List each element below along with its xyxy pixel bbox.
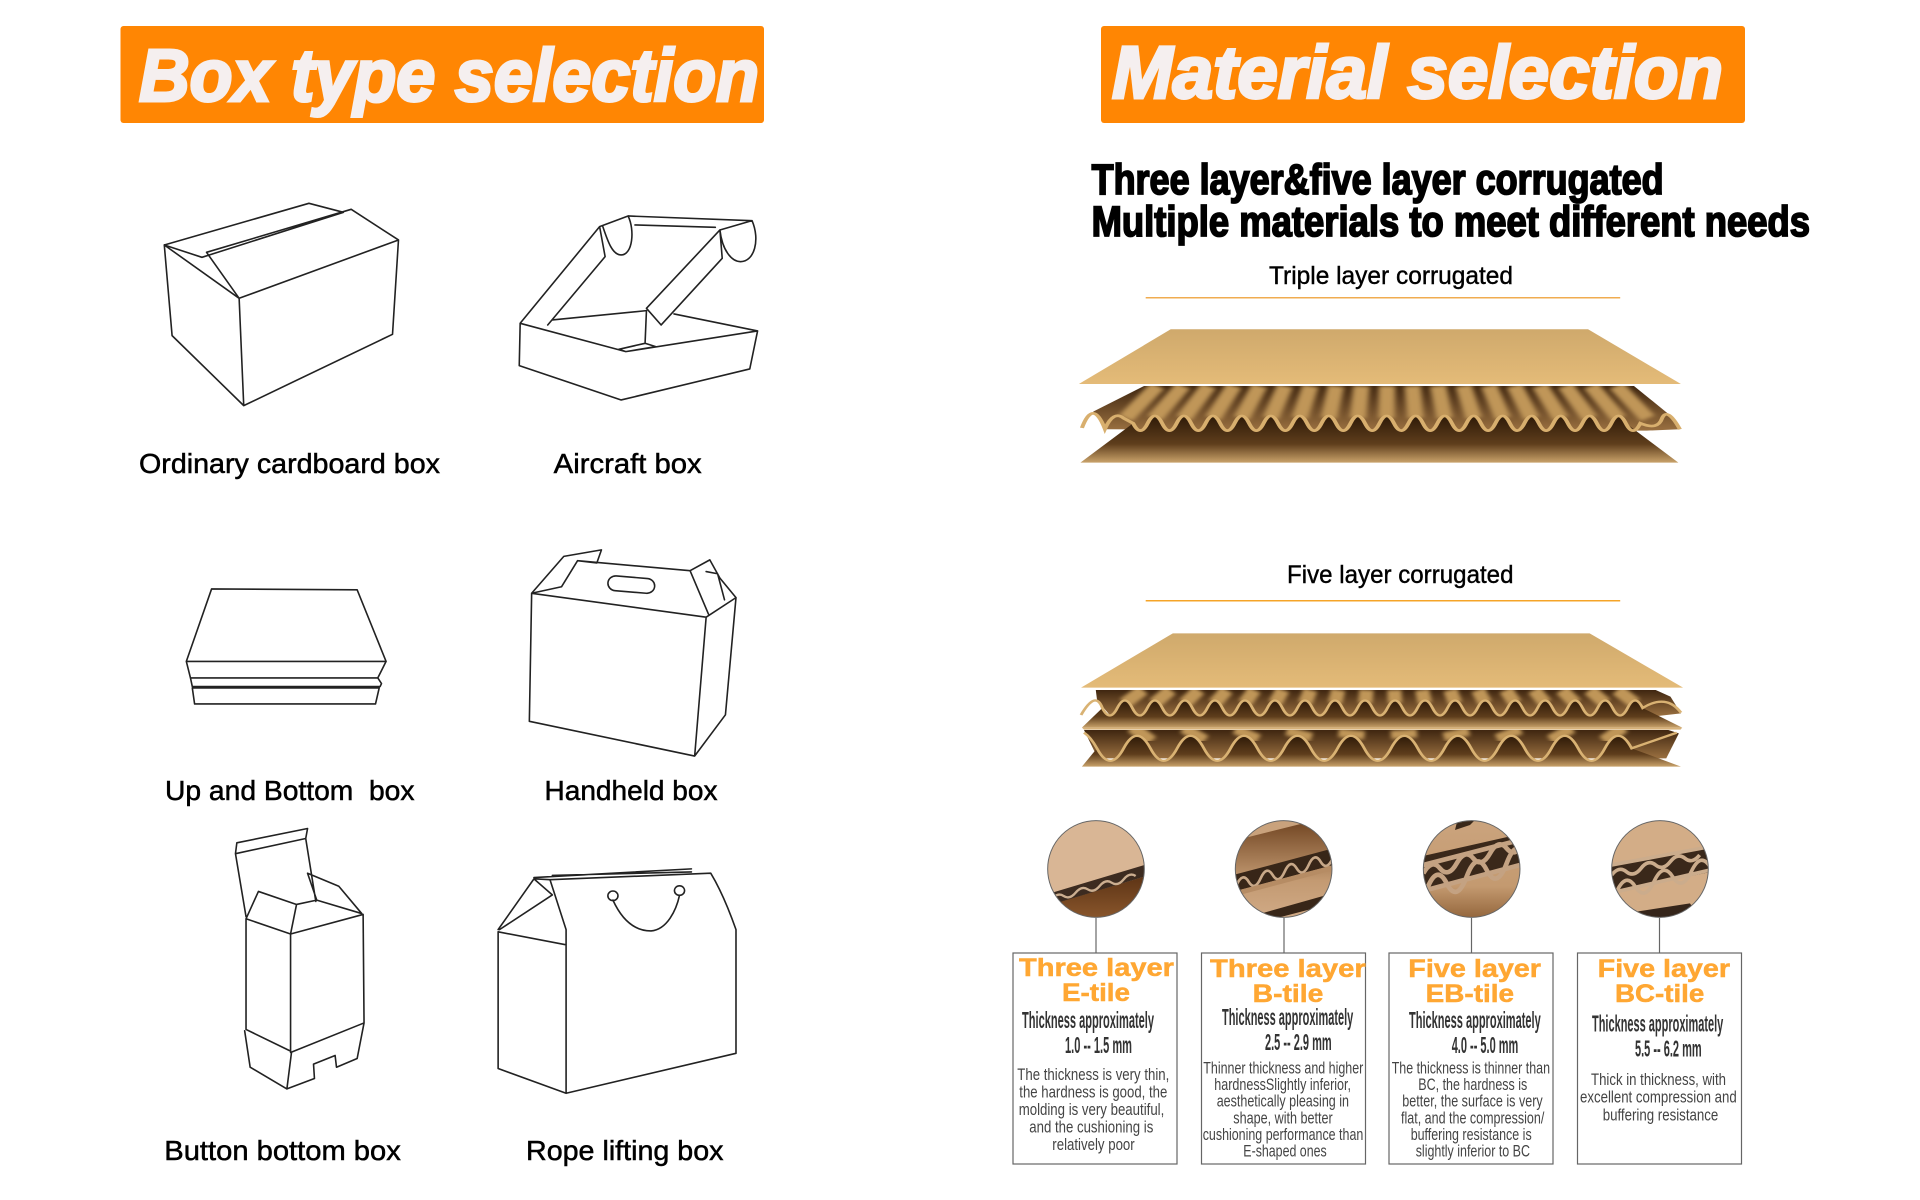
card: three layer B-tile [1202, 807, 1366, 1164]
icon: button bottom box [235, 829, 364, 1089]
card: three layer B-tile: Thinner thickness and higher [1203, 1058, 1364, 1077]
card: five layer EB-tile: EB-tile [1426, 980, 1514, 1008]
icon: EB-tile cross-section [1422, 820, 1520, 918]
subheading: layers and materials: Multiple materials to meet different needs [1092, 198, 1810, 246]
icon: B-tile cross-section [1234, 820, 1332, 918]
icon: aircraft box [519, 216, 758, 400]
card: three layer B-tile: B-tile [1253, 980, 1323, 1008]
icon: BC-tile cross-section [1611, 820, 1709, 918]
label: up and bottom box: Up and Bottom box [165, 775, 414, 806]
panel: material selection [1013, 26, 1810, 1164]
icon: ordinary cardboard box [164, 203, 398, 406]
heading: material selection: Material selection [1112, 31, 1723, 114]
label: rope lifting box: Rope lifting box [526, 1135, 724, 1166]
label: button bottom box: Button bottom box [164, 1135, 401, 1166]
card: five layer EB-tile: 4.0 -- 5.0 mm [1452, 1032, 1518, 1058]
card: three layer B-tile: 2.5 -- 2.9 mm [1265, 1029, 1332, 1055]
card: three layer B-tile: cushioning performance than [1203, 1125, 1363, 1144]
card: five layer EB-tile: better, the surface is very [1402, 1092, 1543, 1111]
card: three layer E-tile [1013, 817, 1177, 1164]
label: handheld box: Handheld box [544, 775, 718, 806]
card: three layer B-tile: shape, with better [1233, 1108, 1333, 1127]
card: five layer EB-tile: The thickness is thinner than [1392, 1058, 1550, 1077]
card: five layer EB-tile: Thickness approximately [1409, 1007, 1541, 1033]
card: five layer BC-tile [1578, 817, 1742, 1164]
card: three layer B-tile: Thickness approximately [1222, 1004, 1353, 1030]
card: five layer EB-tile [1389, 817, 1553, 1164]
card: three layer E-tile: The thickness is very thin, [1017, 1065, 1169, 1084]
card: three layer B-tile: Three layer [1210, 955, 1366, 983]
card: five layer BC-tile: buffering resistance [1603, 1105, 1718, 1124]
card: five layer EB-tile: BC, the hardness is [1418, 1075, 1527, 1094]
illustration: triple layer corrugated sheet [1079, 329, 1681, 463]
card: five layer EB-tile: slightly inferior to BC [1416, 1142, 1530, 1161]
subheading: layers and materials [1092, 156, 1810, 246]
illustration: five layer corrugated sheet [1081, 633, 1683, 767]
card: five layer BC-tile: 5.5 -- 6.2 mm [1635, 1036, 1702, 1062]
icon: handheld box [529, 550, 736, 756]
icon: rope lifting box [498, 869, 736, 1093]
heading: box type selection: Box type selection [139, 34, 759, 117]
card: five layer BC-tile: excellent compression and [1580, 1088, 1737, 1107]
icon: E-tile cross-section [1047, 820, 1145, 918]
card: five layer EB-tile: buffering resistance is [1411, 1125, 1532, 1144]
card: three layer E-tile: the hardness is good, the [1019, 1083, 1167, 1102]
label: ordinary cardboard box: Ordinary cardboard box [139, 448, 440, 479]
card: five layer EB-tile: flat, and the compression/ [1401, 1108, 1544, 1127]
card: three layer E-tile: molding is very beautiful, [1019, 1100, 1164, 1119]
label: triple layer corrugated: Triple layer corrugated [1269, 262, 1513, 290]
card: three layer E-tile: Three layer [1019, 954, 1174, 982]
card: five layer BC-tile: Thickness approximately [1592, 1011, 1723, 1037]
card: three layer E-tile: Thickness approximately [1022, 1007, 1154, 1033]
card: three layer B-tile: hardnessSlightly inferior, [1214, 1075, 1351, 1094]
card: five layer EB-tile: Five layer [1408, 955, 1541, 983]
card: three layer B-tile: aesthetically pleasing in [1217, 1092, 1349, 1111]
card: five layer BC-tile: Five layer [1598, 955, 1730, 983]
card: three layer E-tile: relatively poor [1052, 1135, 1135, 1154]
icon: up and bottom box [186, 589, 386, 704]
subheading: layers and materials: Three layer&five layer corrugated [1092, 156, 1664, 204]
card: five layer BC-tile: BC-tile [1615, 980, 1704, 1008]
card: three layer E-tile: 1.0 -- 1.5 mm [1065, 1032, 1132, 1058]
card: three layer E-tile: and the cushioning is [1029, 1118, 1153, 1137]
card: three layer E-tile: E-tile [1062, 979, 1130, 1007]
panel: box type selection [120, 26, 764, 1166]
card: three layer B-tile: E-shaped ones [1243, 1142, 1327, 1161]
label: aircraft box: Aircraft box [554, 448, 702, 479]
card: five layer BC-tile: Thick in thickness, with [1591, 1070, 1726, 1089]
label: five layer corrugated: Five layer corrugated [1287, 561, 1514, 589]
